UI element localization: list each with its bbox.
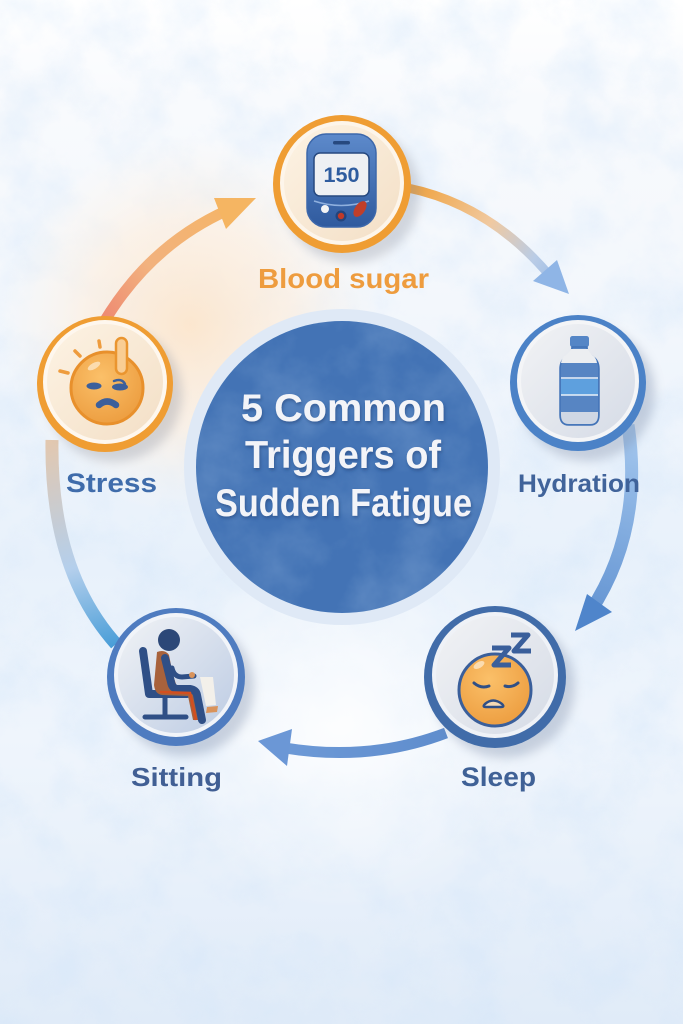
icon: seated person: [143, 629, 218, 720]
icon: glucose meter: [307, 134, 376, 227]
label: sleep: Sleep: [461, 762, 536, 792]
node: blood sugar: [258, 115, 429, 294]
icon: water bottle: [560, 336, 599, 425]
icon: glucose meter: 150: [324, 164, 360, 187]
arrow: sitting to stress: [52, 440, 116, 644]
center disc with title: [184, 309, 500, 625]
label: blood sugar: Blood sugar: [258, 263, 429, 294]
arrow: stress to blood sugar: [104, 198, 256, 322]
icon: stressed face: [60, 338, 143, 424]
label: sitting: Sitting: [131, 762, 222, 792]
arrow: blood sugar to hydration: [408, 188, 569, 294]
arrow: hydration to sleep: [575, 425, 632, 631]
node: hydration: [510, 315, 655, 498]
node: stress: [37, 316, 182, 498]
node: sitting: [107, 608, 254, 792]
node: sleep: [424, 606, 575, 792]
arrow: sleep to sitting: [258, 729, 446, 766]
label: hydration: Hydration: [518, 470, 640, 498]
label: stress: Stress: [66, 468, 157, 498]
title: Triggers of: [245, 434, 442, 477]
title: 5 Common: [241, 387, 446, 430]
icon: sleeping face with zzz: [459, 635, 531, 726]
title: Sudden Fatigue: [215, 482, 472, 525]
title: [215, 387, 472, 525]
